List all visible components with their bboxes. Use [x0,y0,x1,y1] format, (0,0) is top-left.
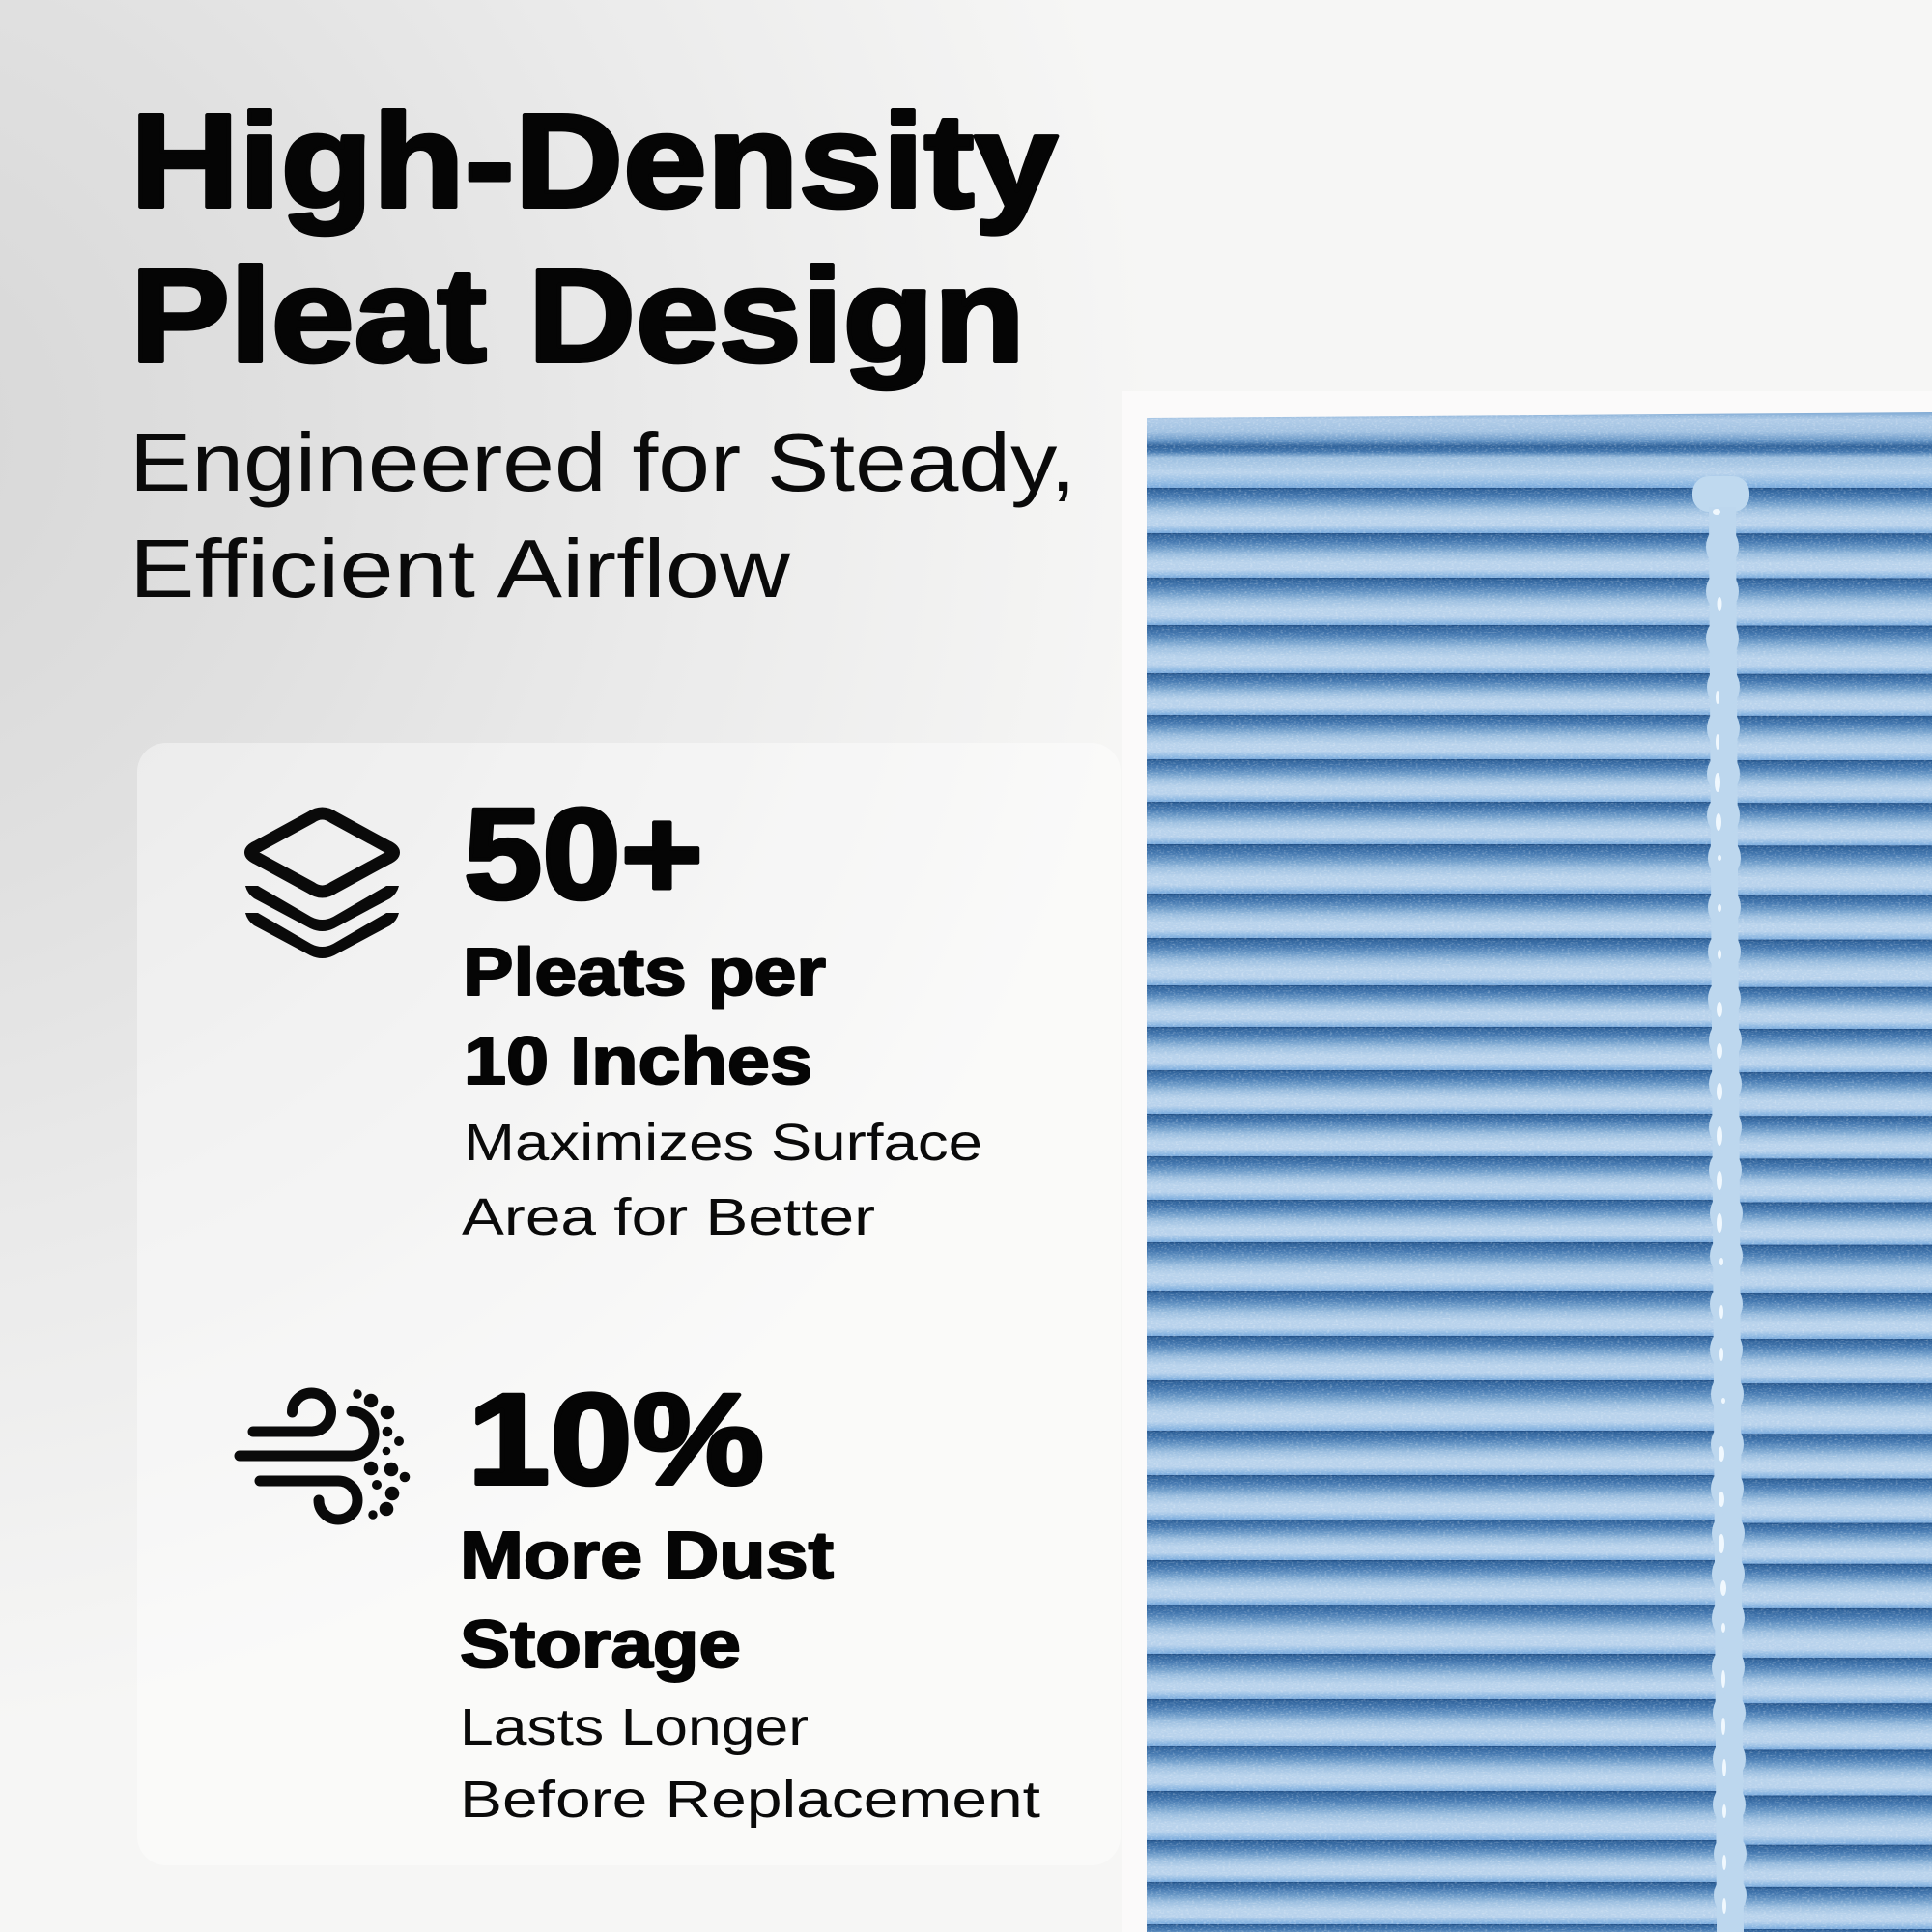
title [130,87,1058,390]
filter photo [1122,391,1932,1932]
stat label line 1: More Dust [460,1518,834,1593]
stat description line 1: Maximizes Surface [464,1114,982,1172]
stat description line 1: Lasts Longer [460,1698,809,1756]
icon: wind and dust [240,1389,410,1520]
icon: stacked layers [245,813,399,958]
stat label line 2: 10 Inches [464,1023,812,1098]
stat label line 1: Pleats per [463,934,826,1009]
stat number: 50+ [464,782,703,926]
subtitle line 2: Efficient Airflow [129,524,791,615]
title line 2: Pleat Design [130,242,1025,390]
stat: 50+ pleats [245,782,982,1246]
subtitle [129,417,1076,615]
stat description line 2: Area for Better [462,1188,875,1246]
stat: 10% dust storage [240,1368,1040,1829]
title line 1: High-Density [130,87,1058,236]
pleated media [1147,412,1932,1932]
stat description line 2: Before Replacement [460,1771,1040,1829]
glue bead [1692,476,1749,1932]
panel: stats [137,743,1121,1865]
filter white frame [1122,391,1932,1932]
stat number: 10% [468,1368,764,1512]
stat label line 2: Storage [460,1606,741,1682]
subtitle line 1: Engineered for Steady, [129,417,1076,509]
